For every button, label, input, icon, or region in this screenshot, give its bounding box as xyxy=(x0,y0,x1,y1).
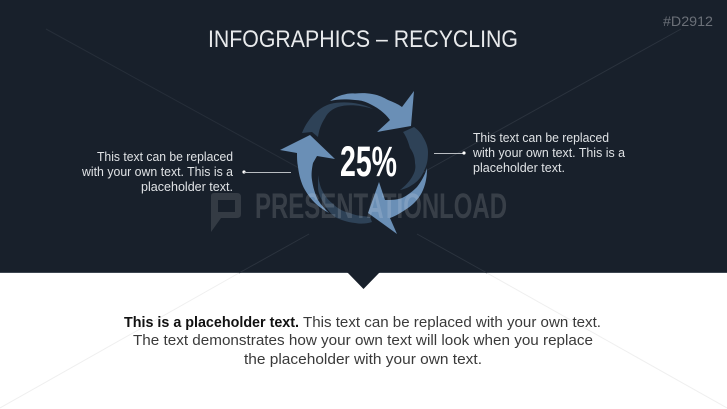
arrow: light left xyxy=(280,135,335,213)
watermark text: PRESENTATIONLOAD xyxy=(255,187,507,226)
percentage value: 25% xyxy=(340,138,397,186)
text block: bottom description: The text demonstrates how your own text will look when you replace xyxy=(133,333,593,349)
arrow: light bottom xyxy=(368,168,427,234)
icon: recycling arrows xyxy=(280,91,428,234)
text block: bottom description: This is a placeholder text. xyxy=(124,315,299,331)
text block: left callout: placeholder text. xyxy=(141,180,233,194)
text block: bottom description: This text can be replaced with your own text. xyxy=(303,315,601,331)
arrow: dark bottom arc xyxy=(318,175,372,224)
text block: right callout: with your own text. This is a xyxy=(472,146,625,160)
arrow: dark right arc xyxy=(400,127,428,190)
connector: right callout xyxy=(434,151,466,155)
icon: watermark P xyxy=(211,193,241,232)
text block: bottom description xyxy=(124,315,601,368)
text block: left callout: with your own text. This is a xyxy=(81,165,233,179)
connector: left callout xyxy=(242,170,291,174)
arrow: light top xyxy=(330,91,414,132)
text block: right callout: This text can be replaced xyxy=(473,131,609,145)
text block: bottom description: the placeholder with your own text. xyxy=(244,352,482,368)
text block: left callout: This text can be replaced xyxy=(97,150,233,164)
arrow: dark top-left arc xyxy=(302,102,373,137)
text block: left callout xyxy=(81,150,233,194)
title: INFOGRAPHICS – RECYCLING xyxy=(208,26,518,53)
product code: #D2912 xyxy=(663,14,713,29)
text block: right callout xyxy=(472,131,625,175)
panel: dark header xyxy=(0,0,727,289)
text block: right callout: placeholder text. xyxy=(473,161,565,175)
watermark xyxy=(211,187,507,232)
